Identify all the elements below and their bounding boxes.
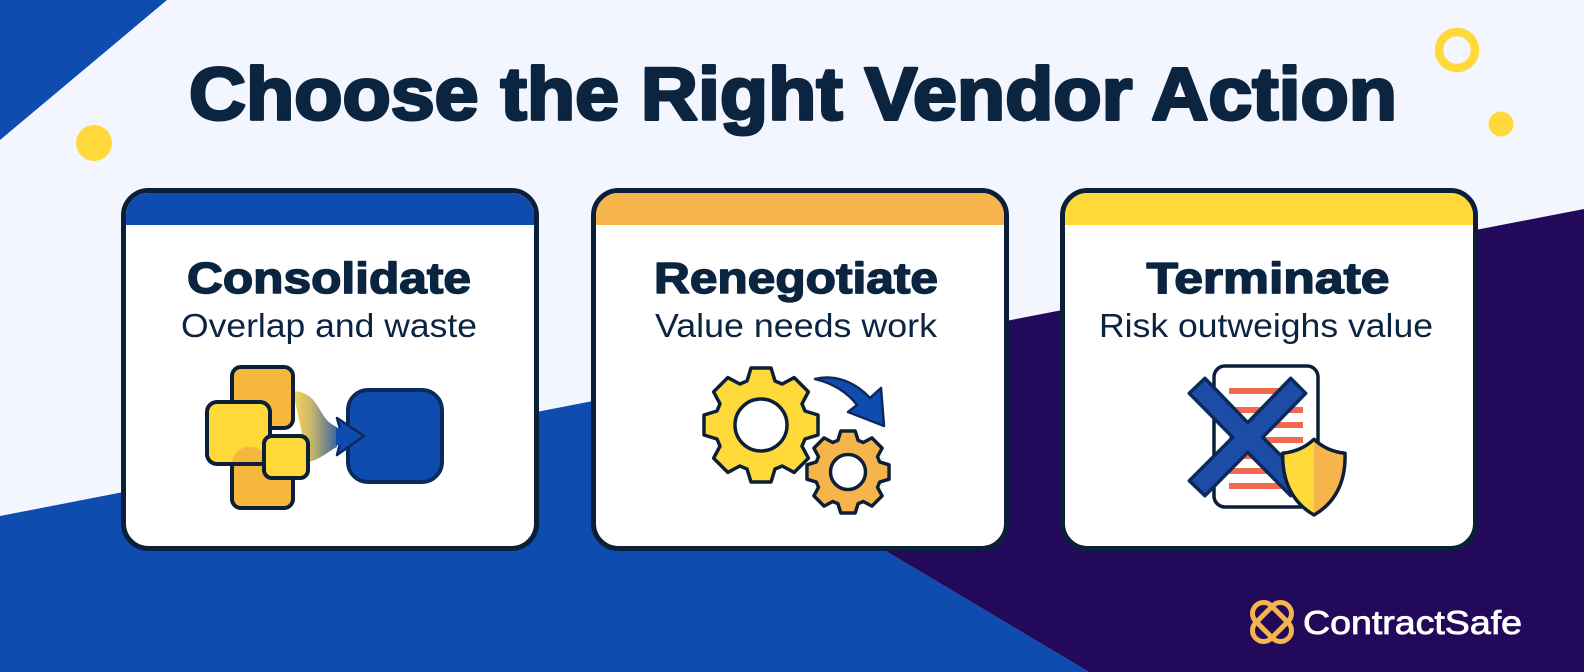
icon: interlocked loops bbox=[1248, 598, 1296, 646]
background: bottom blue area bbox=[0, 395, 1089, 672]
subtitle: value needs work: Value needs work bbox=[655, 307, 938, 344]
logo: ContractSafe bbox=[1248, 598, 1522, 646]
wordmark: ContractSafe bbox=[1303, 604, 1522, 641]
background: bottom-right purple area bbox=[624, 209, 1584, 672]
subtitle: risk outweighs value: Risk outweighs value bbox=[1099, 307, 1433, 344]
icon: crossed-out document with shield bbox=[1189, 366, 1345, 515]
subtitle: overlap and waste: Overlap and waste bbox=[181, 307, 477, 344]
panel: terminate bbox=[1062, 190, 1476, 548]
heading: terminate: Terminate bbox=[1146, 254, 1390, 303]
background: top-left blue triangle bbox=[0, 0, 167, 140]
icon: merging blocks into one bbox=[207, 367, 442, 508]
decoration: yellow ring bbox=[1439, 32, 1475, 68]
heading: renegotiate: Renegotiate bbox=[654, 254, 938, 303]
decoration: right yellow dot bbox=[1488, 112, 1514, 136]
heading: consolidate: Consolidate bbox=[187, 254, 471, 303]
title: Choose the Right Vendor Action bbox=[189, 52, 1397, 136]
panel: renegotiate bbox=[594, 190, 1006, 548]
panel: consolidate bbox=[124, 190, 536, 548]
decoration: left yellow dot bbox=[76, 125, 112, 161]
icon: gears with arrow bbox=[704, 368, 889, 513]
